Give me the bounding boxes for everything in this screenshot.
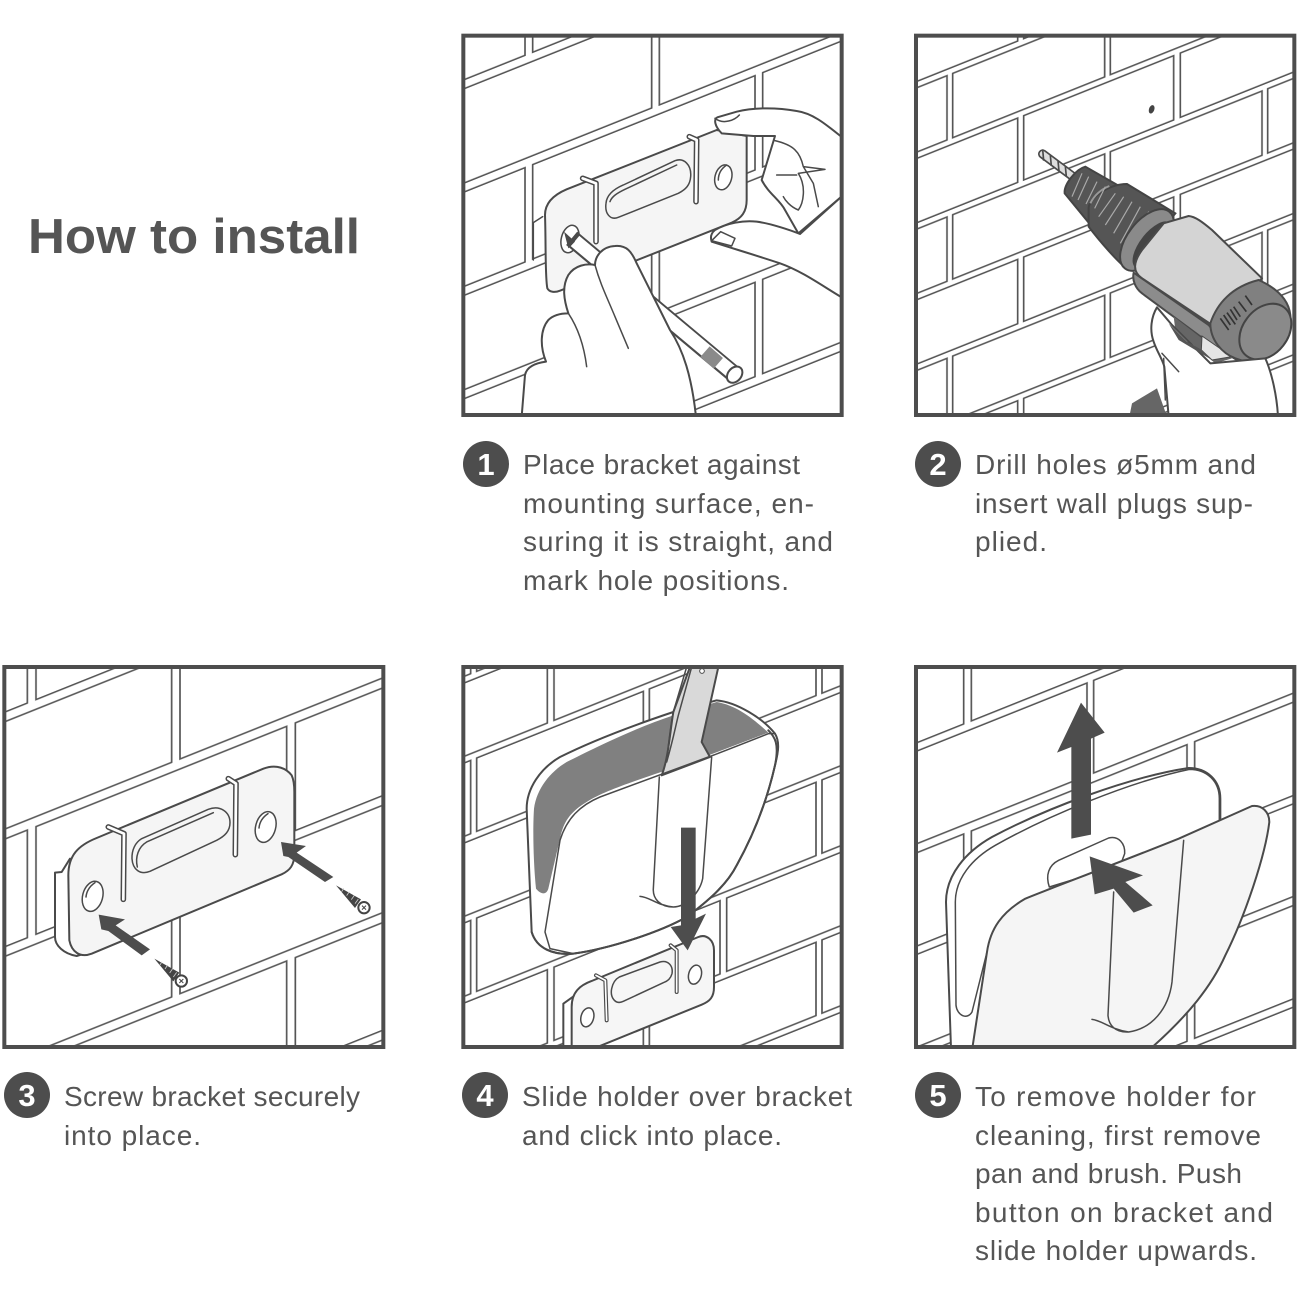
arrow: right screw [281,842,333,882]
text: step 2: insert wall plugs sup- [975,488,1253,519]
text: step 2: plied. [975,526,1047,557]
badge: step 1: 1 [477,447,495,482]
hand holding drill [1151,307,1278,417]
text: step 5: button on bracket and [975,1197,1273,1228]
badge: step 2 [915,441,961,487]
drill handle [1174,317,1232,363]
panel: step 3 illustration [4,667,383,1047]
text: step 2: Drill holes ø5mm and [975,449,1256,480]
holder interior [533,702,768,893]
panel: step 5 illustration [916,667,1294,1050]
holder back inner face [955,769,1219,1016]
text: step 1: Place bracket against [523,449,800,480]
text: step 5: slide holder upwards. [975,1235,1257,1266]
collar inner [1132,221,1166,266]
arrow: push button [1090,856,1153,913]
text: step 3 [64,1081,360,1151]
lower right hand [711,195,843,298]
pencil [564,232,746,386]
holder front [972,806,1269,1050]
text: step 5: pan and brush. Push [975,1158,1242,1189]
text: step 3: Screw bracket securely [64,1081,360,1112]
arrow: left screw [99,915,150,955]
text: step 5: To remove holder for [975,1081,1256,1112]
rear cap ring [1238,302,1292,359]
handle base [1130,388,1166,413]
mounted holder back [946,768,1220,1049]
badge: step 3 [4,1072,50,1118]
arrow: up [1057,703,1105,839]
small bracket [563,936,714,1049]
holder [527,700,778,954]
brush handle [662,667,718,775]
badge: step 2: 2 [929,447,947,482]
badge: step 5: 5 [929,1078,947,1113]
drill bit [1043,149,1075,178]
holder pocket [640,757,712,907]
drill collar [1119,208,1174,272]
badge: step 3: 3 [18,1078,36,1113]
badge: step 1 [463,441,509,487]
text: step 1: suring it is straight, and [523,526,833,557]
drilled hole [1148,105,1155,114]
drill rear cap [1210,280,1290,362]
text: step 3: into place. [64,1120,201,1151]
finger details [715,115,825,210]
push button [1048,837,1125,887]
text: step 4 [522,1081,852,1151]
bracket [55,767,294,956]
pocket line [1092,840,1184,1032]
title: How to install [28,210,360,264]
drill underside [1133,273,1237,360]
drill vents [1220,296,1252,330]
drill body [1135,216,1262,325]
text: step 5: cleaning, first remove [975,1120,1261,1151]
panel: step 1 illustration [463,36,843,417]
text: step 1: mounting surface, en- [523,488,814,519]
bracket [533,130,747,292]
upper right hand [715,108,843,233]
fingernail [712,232,735,246]
badge: step 5 [915,1072,961,1118]
finger detail [1162,353,1179,400]
screw: right [336,885,370,913]
text: step 2 [975,449,1256,557]
text: step 1 [523,449,833,596]
panel: step 4 illustration [463,667,842,1049]
pencil hand [522,246,696,417]
arrow: down [671,828,706,950]
panel: step 2 illustration [916,36,1300,417]
badge: step 4: 4 [476,1078,494,1113]
holder front edge [545,734,778,954]
text: step 4: Slide holder over bracket [522,1081,852,1112]
text: step 4: and click into place. [522,1120,782,1151]
badge: step 4 [462,1072,508,1118]
text: step 5 [975,1081,1273,1266]
drill chuck [1065,167,1175,270]
text: step 1: mark hole positions. [523,565,789,596]
holder edge redraw [532,730,777,954]
screw: left [154,959,187,987]
